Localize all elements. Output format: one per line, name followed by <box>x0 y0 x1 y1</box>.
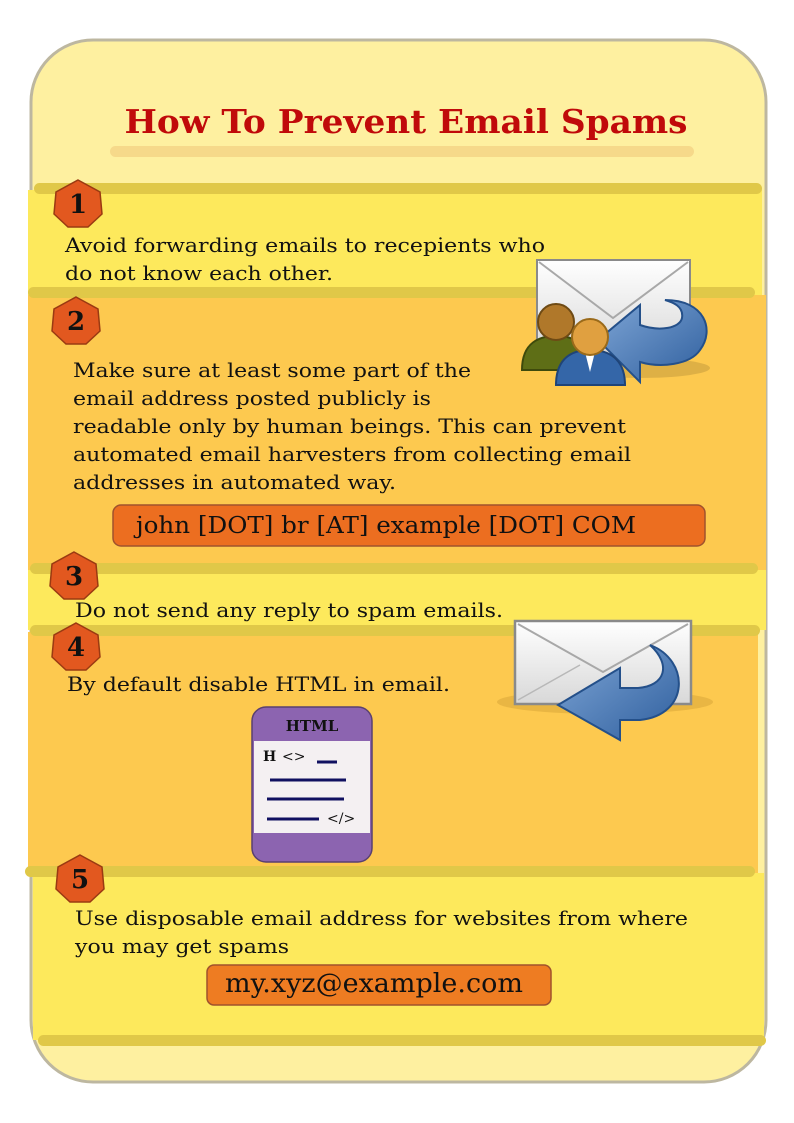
icon: HTML document: </> <box>327 811 355 827</box>
text 2: email address posted publicly is <box>73 386 431 410</box>
text 2: automated email harvesters from collecting email <box>73 442 631 466</box>
text 1: do not know each other. <box>65 261 333 285</box>
title <box>110 102 694 157</box>
badge 3 <box>50 552 98 599</box>
callout: obfuscated address: john [DOT] br [AT] example [DOT] COM <box>133 513 636 539</box>
text 1: Avoid forwarding emails to recepients who <box>64 233 545 257</box>
badge 2: 2 <box>67 307 85 337</box>
icon: HTML document <box>252 707 372 862</box>
panel: step 3 <box>28 552 766 630</box>
text 2: readable only by human beings. This can prevent <box>73 414 626 438</box>
badge 4: 4 <box>67 633 85 663</box>
text 5: you may get spams <box>74 934 289 958</box>
text 2: addresses in automated way. <box>73 470 396 494</box>
callout: disposable address <box>207 965 551 1005</box>
icon: HTML document: HTML <box>286 717 339 735</box>
icon: HTML document: <> <box>282 749 305 765</box>
panel: step 4 <box>28 623 760 873</box>
icon: envelope with contacts <box>522 260 710 385</box>
panel: step 5 <box>25 855 766 1046</box>
badge 5 <box>56 855 104 902</box>
badge 5: 5 <box>71 865 89 895</box>
text 3: Do not send any reply to spam emails. <box>75 598 503 622</box>
title: How To Prevent Email Spams <box>124 102 688 141</box>
badge 1: 1 <box>69 190 87 220</box>
callout: disposable address: my.xyz@example.com <box>225 969 523 999</box>
badge 1 <box>54 180 102 227</box>
text 5: Use disposable email address for websites from where <box>75 906 688 930</box>
badge 4 <box>52 623 100 670</box>
badge 2 <box>52 297 100 344</box>
text 2: Make sure at least some part of the <box>73 358 471 382</box>
panel: step 2 <box>28 287 766 570</box>
icon: HTML document: H <box>263 749 276 765</box>
text 4: By default disable HTML in email. <box>67 672 450 696</box>
badge 3: 3 <box>65 562 83 592</box>
icon: envelope with reply arrow <box>497 621 713 740</box>
callout: obfuscated address <box>113 505 705 546</box>
panel: step 1 <box>28 180 762 295</box>
